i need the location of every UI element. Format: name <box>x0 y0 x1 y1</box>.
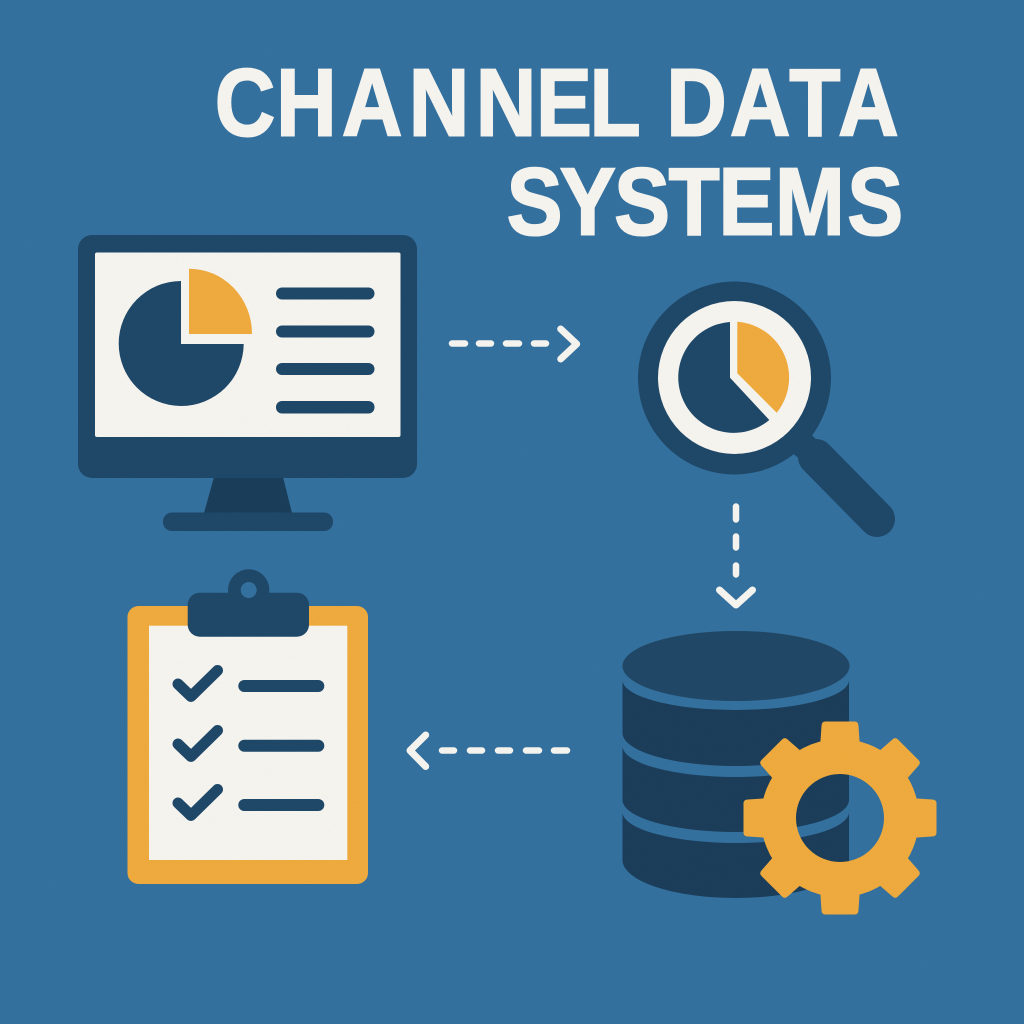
gear <box>744 722 936 914</box>
title <box>215 50 903 256</box>
icon: magnifying glass with pie chart <box>638 282 877 519</box>
arrow: database to clipboard <box>410 735 567 766</box>
arrow: magnifier to database <box>720 506 752 605</box>
icon: clipboard checklist <box>128 569 368 884</box>
icon: computer monitor with pie chart <box>78 235 417 531</box>
title: SYSTEMS <box>507 149 903 256</box>
title: CHANNEL DATA <box>215 50 899 157</box>
icon: database with gear <box>622 631 936 914</box>
database cylinder <box>622 631 850 898</box>
arrow: monitor to magnifier <box>452 329 577 359</box>
